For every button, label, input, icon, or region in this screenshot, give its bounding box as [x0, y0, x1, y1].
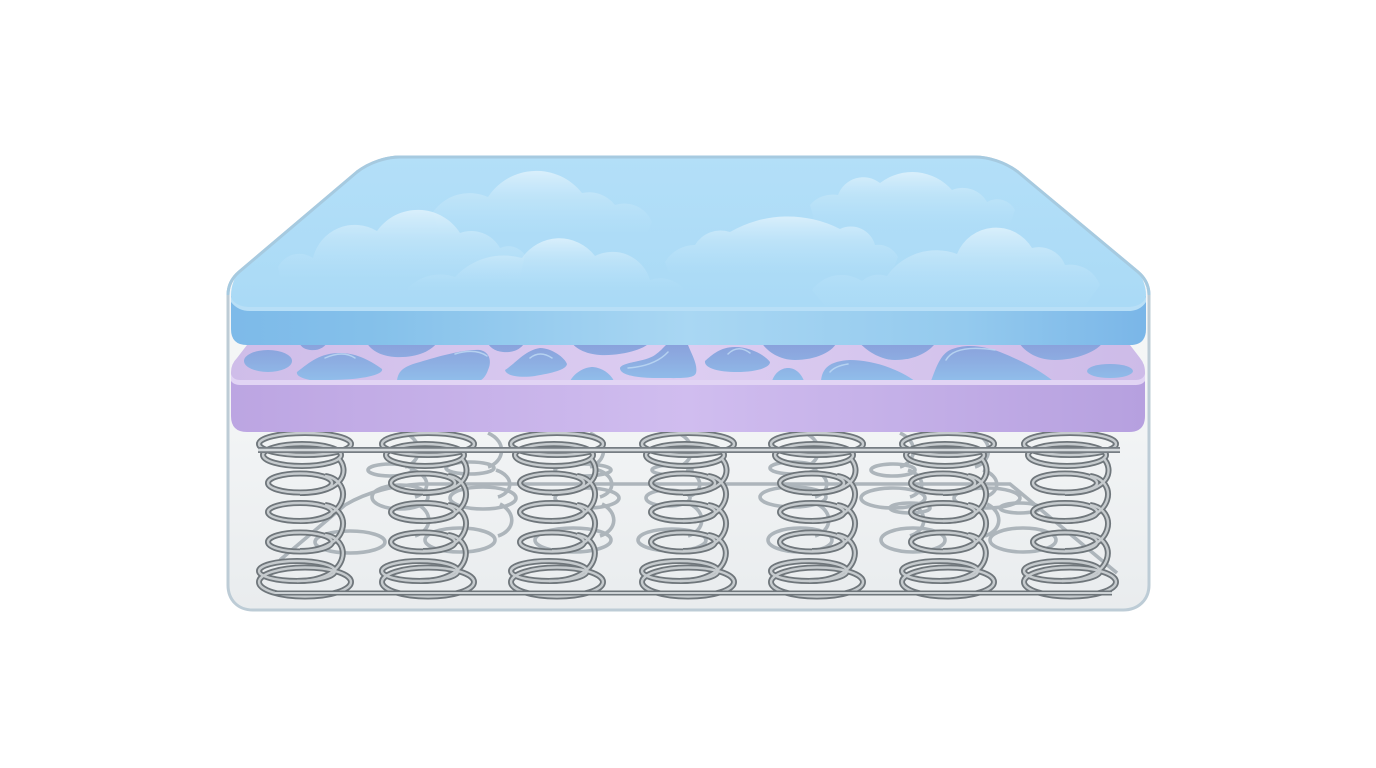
panel: blue cloud foam layer: [228, 157, 1149, 345]
purple layer edge highlight: [231, 374, 1145, 385]
bottom frame wire: [275, 590, 1112, 596]
top frame wire: [258, 447, 1120, 453]
blue layer rim outline: [228, 157, 1149, 295]
gel blobs: [244, 340, 1133, 381]
front spring 1: [259, 433, 351, 596]
blue layer edge highlight: [231, 297, 1146, 311]
blue layer front side: [231, 296, 1146, 345]
front spring 2: [382, 433, 474, 596]
purple layer front side: [231, 380, 1145, 432]
front spring 5: [771, 433, 863, 596]
cloud: middle: [665, 216, 898, 290]
rear spring row: [280, 433, 1117, 573]
gel blob highlights: [325, 348, 995, 372]
front spring 7: [1024, 433, 1116, 596]
front spring 3: [511, 433, 603, 596]
cloud: front left: [278, 210, 525, 300]
panel: clear outer casing: [228, 157, 1149, 610]
panel: purple gel foam layer: [231, 340, 1145, 432]
blue layer top surface: [231, 157, 1146, 307]
front spring 6: [902, 433, 994, 596]
cloud: front centre: [408, 238, 683, 306]
front spring 4: [642, 433, 734, 596]
cloud: back right: [810, 172, 1015, 240]
cloud: back left: [433, 171, 652, 250]
purple layer top surface: [231, 345, 1145, 390]
cloud: front right: [812, 228, 1100, 306]
